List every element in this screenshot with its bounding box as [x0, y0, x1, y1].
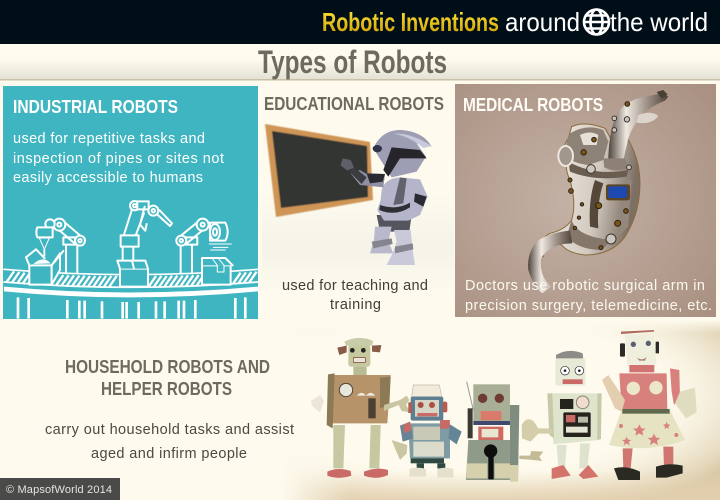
- footer: copyright: [0, 478, 120, 500]
- box: left: [26, 249, 63, 285]
- blue display: [606, 184, 630, 200]
- illustration: tin robots right group: [510, 330, 697, 482]
- illustration: blackboard: [265, 124, 373, 217]
- heading: Types of Robots: Types of Robots: [258, 44, 447, 80]
- panel text: educational robots description: [282, 278, 428, 313]
- robot body: [377, 177, 428, 221]
- box: centre: [117, 261, 148, 287]
- panel text: industrial robots description: easily accessible to humans: [13, 170, 203, 186]
- icon: globe: [584, 10, 609, 34]
- panel heading: medical robots: MEDICAL ROBOTS: [463, 95, 603, 115]
- panel heading: household and helper robots: HELPER ROBOTS: [101, 379, 232, 399]
- panel text: medical robots description: precision surgery, telemedicine, etc.: [465, 298, 712, 314]
- panel text: household robots description: [45, 422, 294, 462]
- header bar: [0, 0, 720, 44]
- panel text: industrial robots description: inspection of pipes or sites not: [13, 151, 224, 167]
- panel text: educational robots description: used for teaching and: [282, 278, 428, 294]
- illustration: conveyor belt and robot arms: [4, 201, 258, 319]
- panel: educational robots: [262, 94, 454, 313]
- robot arm: centre: [121, 201, 172, 260]
- illustration: tin robots left group: [311, 338, 510, 480]
- header title: Robotic Inventions: Robotic Inventions: [322, 7, 499, 37]
- panel heading: educational robots: EDUCATIONAL ROBOTS: [264, 94, 444, 114]
- panel text: household robots description: carry out household tasks and assist: [45, 422, 294, 438]
- header title: around: around: [505, 7, 580, 37]
- robot arm: left: [36, 219, 85, 273]
- oesophagus tube: [608, 93, 668, 160]
- duodenum tube: [528, 231, 572, 293]
- bulb shading: [566, 127, 608, 165]
- robot legs: [370, 215, 415, 265]
- panel text: medical robots description: [465, 278, 712, 314]
- illustration: robotic stomach: [528, 90, 668, 293]
- panel text: medical robots description: Doctors use robotic surgical arm in: [465, 278, 705, 294]
- tin robot 3: grey-green: [466, 382, 510, 480]
- panel: industrial robots: [3, 86, 258, 319]
- rivets: [568, 102, 630, 250]
- panel heading: household and helper robots: [65, 357, 270, 399]
- panel text: industrial robots description: used for repetitive tasks and: [13, 131, 205, 147]
- panel: household and helper robots: [45, 320, 720, 500]
- porthole: [558, 146, 573, 166]
- panel text: industrial robots description: [13, 131, 224, 186]
- tin robot 5: pink: [602, 330, 697, 480]
- heading band: [0, 44, 720, 80]
- panel heading: household and helper robots: HOUSEHOLD ROBOTS AND: [65, 357, 270, 377]
- robot head: [373, 130, 432, 177]
- header title: the world: the world: [610, 7, 708, 37]
- footer: copyright: © MapsofWorld 2014: [6, 484, 112, 496]
- tin robot 3 right edge: [510, 405, 543, 482]
- robot arm and hand: [351, 170, 385, 187]
- panel text: household robots description: aged and infirm people: [91, 446, 247, 462]
- panel heading: industrial robots: INDUSTRIAL ROBOTS: [13, 97, 178, 117]
- box: right: [202, 258, 233, 285]
- panel: medical robots: [455, 84, 716, 317]
- dark inner channel: [590, 180, 603, 228]
- tin robot 1: brown: [311, 338, 411, 478]
- conveyor belt: [4, 269, 258, 319]
- stomach body: [538, 124, 640, 257]
- tin robot 2: blue: [392, 385, 462, 478]
- illustration: robot teacher: [341, 130, 432, 265]
- tin robot 4: white: [522, 351, 602, 479]
- panel text: educational robots description: training: [330, 297, 381, 313]
- robot arm: right: [176, 219, 231, 273]
